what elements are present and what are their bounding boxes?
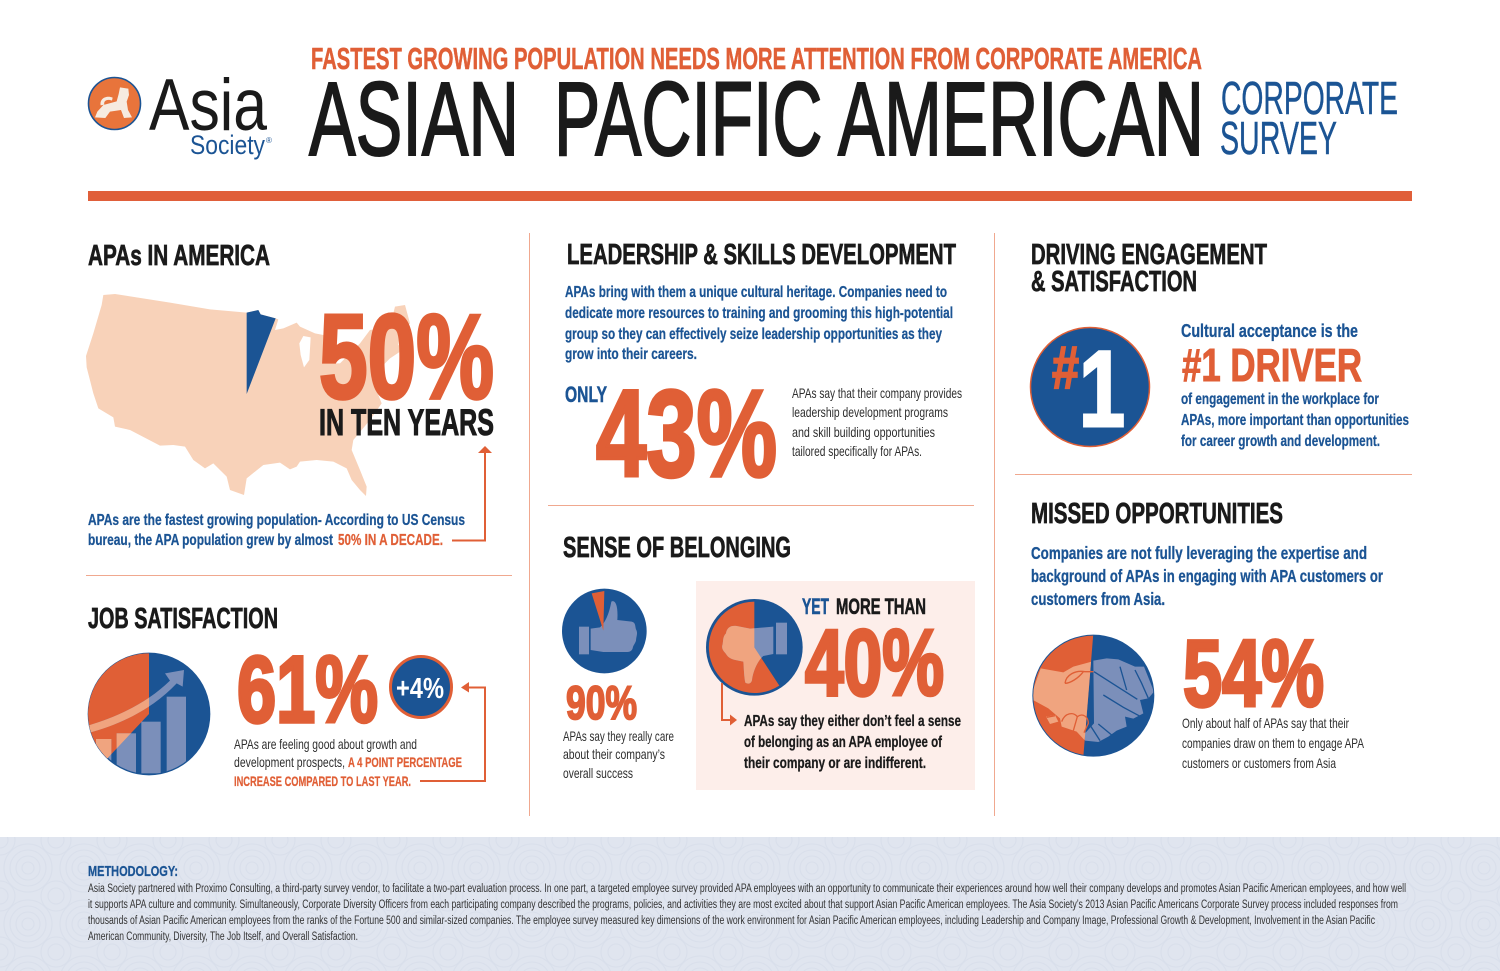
badge: +4%: +4% [396, 673, 444, 705]
text block: APAs are the fastest growing population- According to US Census [88, 512, 465, 529]
text block [1181, 391, 1409, 450]
icon: handshake pie [1020, 633, 1154, 757]
text block: APAs say they really care [563, 728, 674, 744]
heading: APAs IN AMERICA [88, 240, 270, 272]
text block: 50% IN A DECADE. [338, 532, 443, 549]
stat: 50%: 50% [319, 290, 494, 424]
text block [563, 728, 674, 781]
header: main title: ASIAN [309, 61, 519, 178]
text block: leadership development programs [792, 404, 948, 420]
stat: #1 driver: #1 DRIVER [1182, 339, 1362, 391]
header: corporate survey [1220, 72, 1398, 164]
label: only: ONLY [565, 382, 607, 407]
text block: APAs are feeling good about growth and [234, 736, 417, 752]
text block: A 4 POINT PERCENTAGE [348, 754, 462, 770]
icon: number one badge: # [1052, 334, 1079, 401]
heading: LEADERSHIP & SKILLS DEVELOPMENT [567, 239, 956, 271]
text block [744, 713, 961, 772]
text block [1031, 543, 1383, 609]
arrow [722, 683, 737, 726]
heading: DRIVING ENGAGEMENT [1031, 239, 1267, 271]
header: corporate survey: SURVEY [1220, 112, 1337, 164]
text block: overall success [563, 765, 633, 781]
text block: bureau, the APA population grew by almost [88, 532, 333, 549]
panel: APAs in America [86, 240, 494, 549]
heading: & SATISFACTION [1031, 266, 1197, 298]
icon: lion emblem [88, 78, 140, 130]
wordmark: Society: Society [190, 130, 265, 160]
text block: and skill building opportunities [792, 424, 935, 440]
text block [234, 736, 462, 789]
stat label: IN TEN YEARS [319, 402, 494, 443]
text block [1182, 715, 1364, 771]
heading: MISSED OPPORTUNITIES [1031, 498, 1283, 530]
text block: of engagement in the workplace for [1181, 391, 1379, 408]
text block: group so they can effectively seize leadership opportunities as they [565, 326, 942, 343]
arrow [452, 446, 492, 540]
text block: grow into their careers. [565, 346, 697, 363]
logo: Asia Society [88, 65, 272, 160]
text block: of belonging as an APA employee of [744, 734, 943, 751]
stat: 40%: 40% [805, 610, 944, 715]
text block: customers from Asia. [1031, 589, 1165, 609]
icon: number one badge [1030, 328, 1150, 449]
heading [1031, 239, 1267, 298]
text block: background of APAs in engaging with APA customers or [1031, 566, 1383, 586]
icon: thumbs up pie [562, 589, 647, 673]
panel: sense of belonging [562, 532, 975, 790]
stat: 61%: 61% [237, 637, 378, 743]
text block: tailored specifically for APAs. [792, 443, 922, 459]
minnesota wedge [247, 310, 276, 394]
text block [88, 512, 465, 549]
heading: yet more than: MORE THAN [836, 594, 926, 619]
heading: yet more than [802, 594, 926, 619]
panel: job satisfaction [87, 603, 485, 789]
text block: companies draw on them to engage APA [1182, 735, 1364, 751]
text block: APAs say that their company provides [792, 385, 962, 401]
header: main title [309, 61, 1204, 178]
callout panel: yet more than 40% [696, 581, 975, 790]
panel: methodology footer [0, 837, 1500, 971]
text block [565, 284, 953, 363]
text block: customers or customers from Asia [1182, 755, 1336, 771]
badge: +4% [390, 656, 452, 718]
stat: 43%: 43% [596, 366, 777, 503]
heading: yet more than: YET [802, 594, 829, 619]
panel: missed opportunities [1020, 498, 1383, 771]
text block: their company or are indifferent. [744, 755, 926, 772]
text block [792, 385, 962, 459]
text block: American Community, Diversity, The Job Itself, and Overall Satisfaction. [88, 931, 358, 943]
wordmark: Asia: Asia [149, 65, 267, 146]
icon: growth chart pie [87, 653, 210, 776]
registered mark: ® [266, 136, 272, 145]
text block: APAs bring with them a unique cultural heritage. Companies need to [565, 284, 947, 301]
panel: driving engagement and satisfaction [1030, 239, 1409, 450]
text block: dedicate more resources to training and grooming this high-potential [565, 305, 953, 322]
text block: APAs, more important than opportunities [1181, 412, 1409, 429]
heading: SENSE OF BELONGING [563, 532, 791, 564]
lake michigan [299, 336, 311, 367]
stat: 54%: 54% [1183, 621, 1324, 727]
text block: APAs say they either don’t feel a sense [744, 713, 961, 730]
text block: for career growth and development. [1181, 433, 1380, 450]
icon: thumbs down pie [706, 599, 803, 696]
arrow [420, 682, 485, 781]
stat: 90%: 90% [566, 676, 637, 729]
text block: about their company’s [563, 746, 665, 762]
heading: JOB SATISFACTION [88, 603, 278, 635]
text block: development prospects, [234, 754, 345, 770]
text block: Only about half of APAs say that their [1182, 715, 1349, 731]
map of the United States [86, 294, 410, 496]
text block: Companies are not fully leveraging the expertise and [1031, 543, 1367, 563]
panel: leadership and skills development [565, 239, 962, 503]
text: cultural acceptance: Cultural acceptance is the [1181, 321, 1358, 341]
icon: number one badge: 1 [1079, 328, 1125, 449]
heading: methodology: METHODOLOGY: [88, 863, 178, 880]
text block [88, 883, 1406, 943]
text block: INCREASE COMPARED TO LAST YEAR. [234, 773, 411, 789]
